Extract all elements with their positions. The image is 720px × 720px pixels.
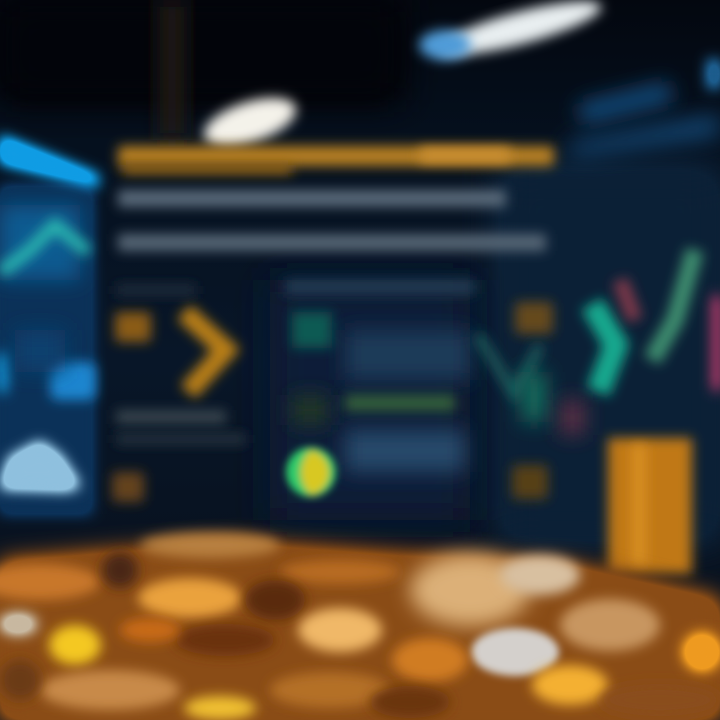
column: middle text — [285, 280, 475, 472]
heading bar — [118, 146, 554, 174]
ceiling lights — [198, 0, 605, 156]
column: left arrow callout — [112, 285, 246, 502]
icon: green and yellow circle — [286, 447, 336, 497]
foreground: gold coins — [0, 532, 720, 720]
text block: intro lines — [118, 190, 546, 251]
background wall chart — [570, 60, 720, 155]
panel: left screen — [0, 136, 98, 514]
column: right chart with candles — [478, 250, 720, 499]
bar: orange column — [608, 438, 692, 574]
